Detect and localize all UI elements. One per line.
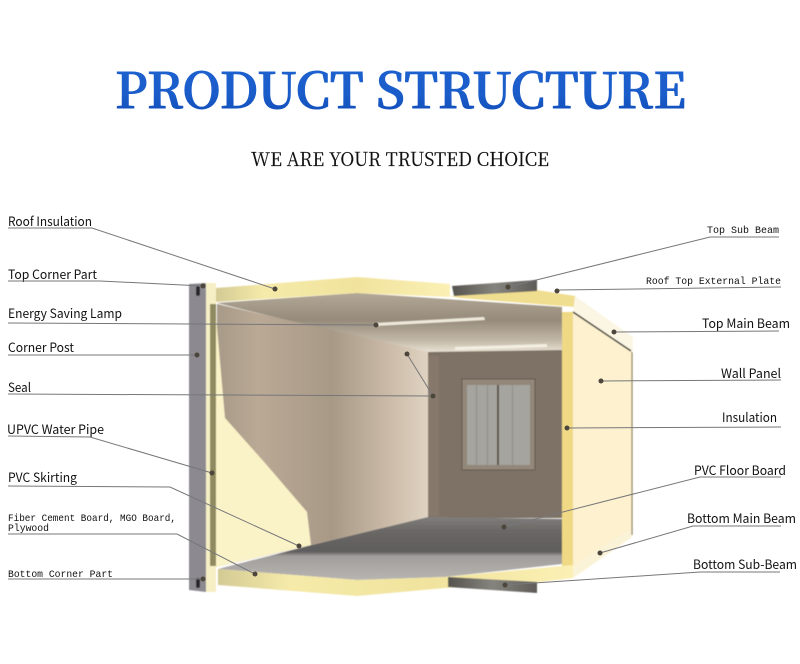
callout: Insulation xyxy=(564,407,781,430)
callout: Bottom Sub-Beam: Bottom Sub-Beam xyxy=(693,554,797,573)
callout: Fiber Cement Board: Fiber Cement Board, MGO Board, xyxy=(8,513,176,525)
roof front edge xyxy=(216,277,450,302)
corner post xyxy=(189,283,216,592)
callout: Insulation: Insulation xyxy=(722,407,777,426)
bottom main beam xyxy=(218,565,573,596)
callout: Roof Top External Plate: Roof Top External Plate xyxy=(646,276,781,288)
callout: Roof Top External Plate xyxy=(554,276,781,294)
callout: Energy Saving Lamp xyxy=(8,303,378,328)
back wall xyxy=(428,350,563,518)
floor xyxy=(218,517,562,580)
callout: UPVC Water Pipe: UPVC Water Pipe xyxy=(7,419,104,438)
callout: Bottom Corner Part: Bottom Corner Part xyxy=(8,569,113,581)
ceiling lamps xyxy=(376,317,485,326)
callout: Roof Insulation: Roof Insulation xyxy=(8,211,92,230)
callout: Corner Post: Corner Post xyxy=(8,337,74,356)
callout: Fiber Cement Board: Plywood xyxy=(8,523,49,535)
callout: Wall Panel: Wall Panel xyxy=(721,363,781,382)
callout: PVC Skirting xyxy=(8,467,302,548)
left wall xyxy=(216,304,428,567)
callout: Top Corner Part xyxy=(8,264,206,288)
callout: Bottom Main Beam xyxy=(598,508,796,556)
callout: PVC Floor Board: PVC Floor Board xyxy=(694,460,786,479)
callout: Roof Insulation xyxy=(8,211,278,292)
wall insulation strip xyxy=(562,312,573,566)
title: PRODUCT STRUCTURE xyxy=(115,53,686,123)
container illustration xyxy=(189,277,633,596)
callout: Seal xyxy=(8,352,436,398)
callout: Energy Saving Lamp: Energy Saving Lamp xyxy=(8,303,122,322)
callout: Top Main Beam xyxy=(612,313,790,334)
light patch on left wall xyxy=(216,316,311,567)
top sub beam xyxy=(452,280,537,296)
callout: Top Corner Part: Top Corner Part xyxy=(8,264,97,283)
callout: Bottom Corner Part xyxy=(8,569,206,582)
ceiling xyxy=(217,293,562,353)
callout: PVC Floor Board xyxy=(502,460,786,530)
callout: Top Main Beam: Top Main Beam xyxy=(702,313,790,332)
bottom sub beam xyxy=(448,577,537,593)
callout: UPVC Water Pipe xyxy=(7,419,214,476)
callout: Top Sub Beam xyxy=(506,225,779,290)
window xyxy=(462,379,535,470)
callout: Bottom Sub-Beam xyxy=(502,554,797,588)
subtitle: WE ARE YOUR TRUSTED CHOICE xyxy=(251,145,549,172)
callout: Fiber Cement Board xyxy=(8,513,258,576)
callout: Corner Post xyxy=(8,337,200,358)
callout: Seal: Seal xyxy=(8,377,31,396)
callout: Wall Panel xyxy=(598,363,781,384)
callout: Top Sub Beam: Top Sub Beam xyxy=(707,225,779,237)
callout: PVC Skirting: PVC Skirting xyxy=(8,467,77,486)
right wall panel xyxy=(573,312,632,578)
callout: Bottom Main Beam: Bottom Main Beam xyxy=(687,508,796,527)
